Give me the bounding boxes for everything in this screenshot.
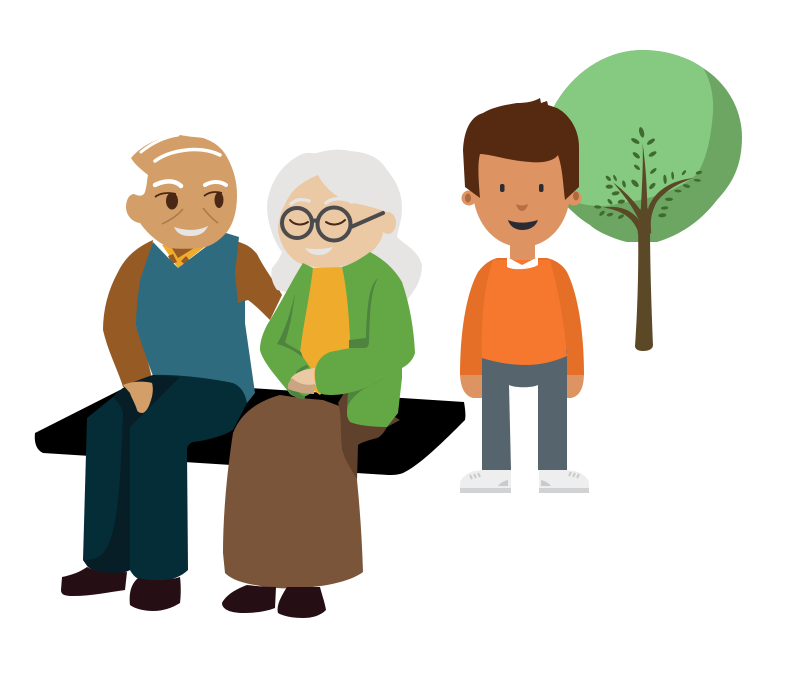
boy eyes [500, 184, 544, 192]
bench [35, 388, 465, 475]
man collar [162, 245, 207, 268]
man right arm [230, 242, 282, 320]
tree [540, 50, 742, 351]
tree crown [540, 50, 742, 242]
man hand [123, 382, 153, 413]
tree trunk and branches [603, 143, 693, 351]
boy face [473, 130, 570, 247]
old man [61, 135, 282, 611]
woman hands [288, 368, 316, 394]
boy hair [463, 98, 579, 200]
boy hands [460, 372, 584, 398]
cardigan folds [277, 278, 387, 411]
woman face [278, 175, 387, 268]
man wrinkles [162, 208, 218, 224]
boy mouth [508, 220, 538, 230]
woman closed eyes [290, 220, 345, 224]
man pants [83, 375, 247, 581]
boy ears [462, 190, 582, 206]
woman ear [380, 212, 396, 234]
man head [126, 135, 237, 249]
old woman [222, 150, 422, 618]
boy nose [516, 204, 528, 211]
man smile [174, 226, 208, 236]
woman shoes [222, 585, 326, 618]
woman skirt [223, 395, 363, 588]
man left arm [103, 240, 153, 387]
man pants shadow [83, 375, 180, 574]
cardigan right side and sleeve [315, 252, 415, 427]
woman skirt shadow [338, 388, 400, 480]
woman smile [305, 247, 333, 255]
woman cardigan [260, 252, 415, 427]
tree leaves [594, 127, 703, 220]
man vest [136, 233, 255, 403]
woman shirt [298, 267, 350, 395]
woman glasses [282, 208, 383, 240]
boy neck and collar [507, 240, 538, 269]
boy shoes [460, 470, 589, 493]
cardigan left side [260, 263, 313, 397]
man highlights and eyebrows [141, 135, 226, 186]
man shoes [61, 567, 181, 611]
man eyes [155, 192, 224, 210]
boy [460, 98, 589, 493]
woman eyebrows [291, 199, 352, 204]
boy sweater body [482, 260, 567, 365]
woman hair [267, 150, 422, 300]
boy legs [482, 350, 567, 470]
boy sweater sleeves [460, 258, 584, 375]
